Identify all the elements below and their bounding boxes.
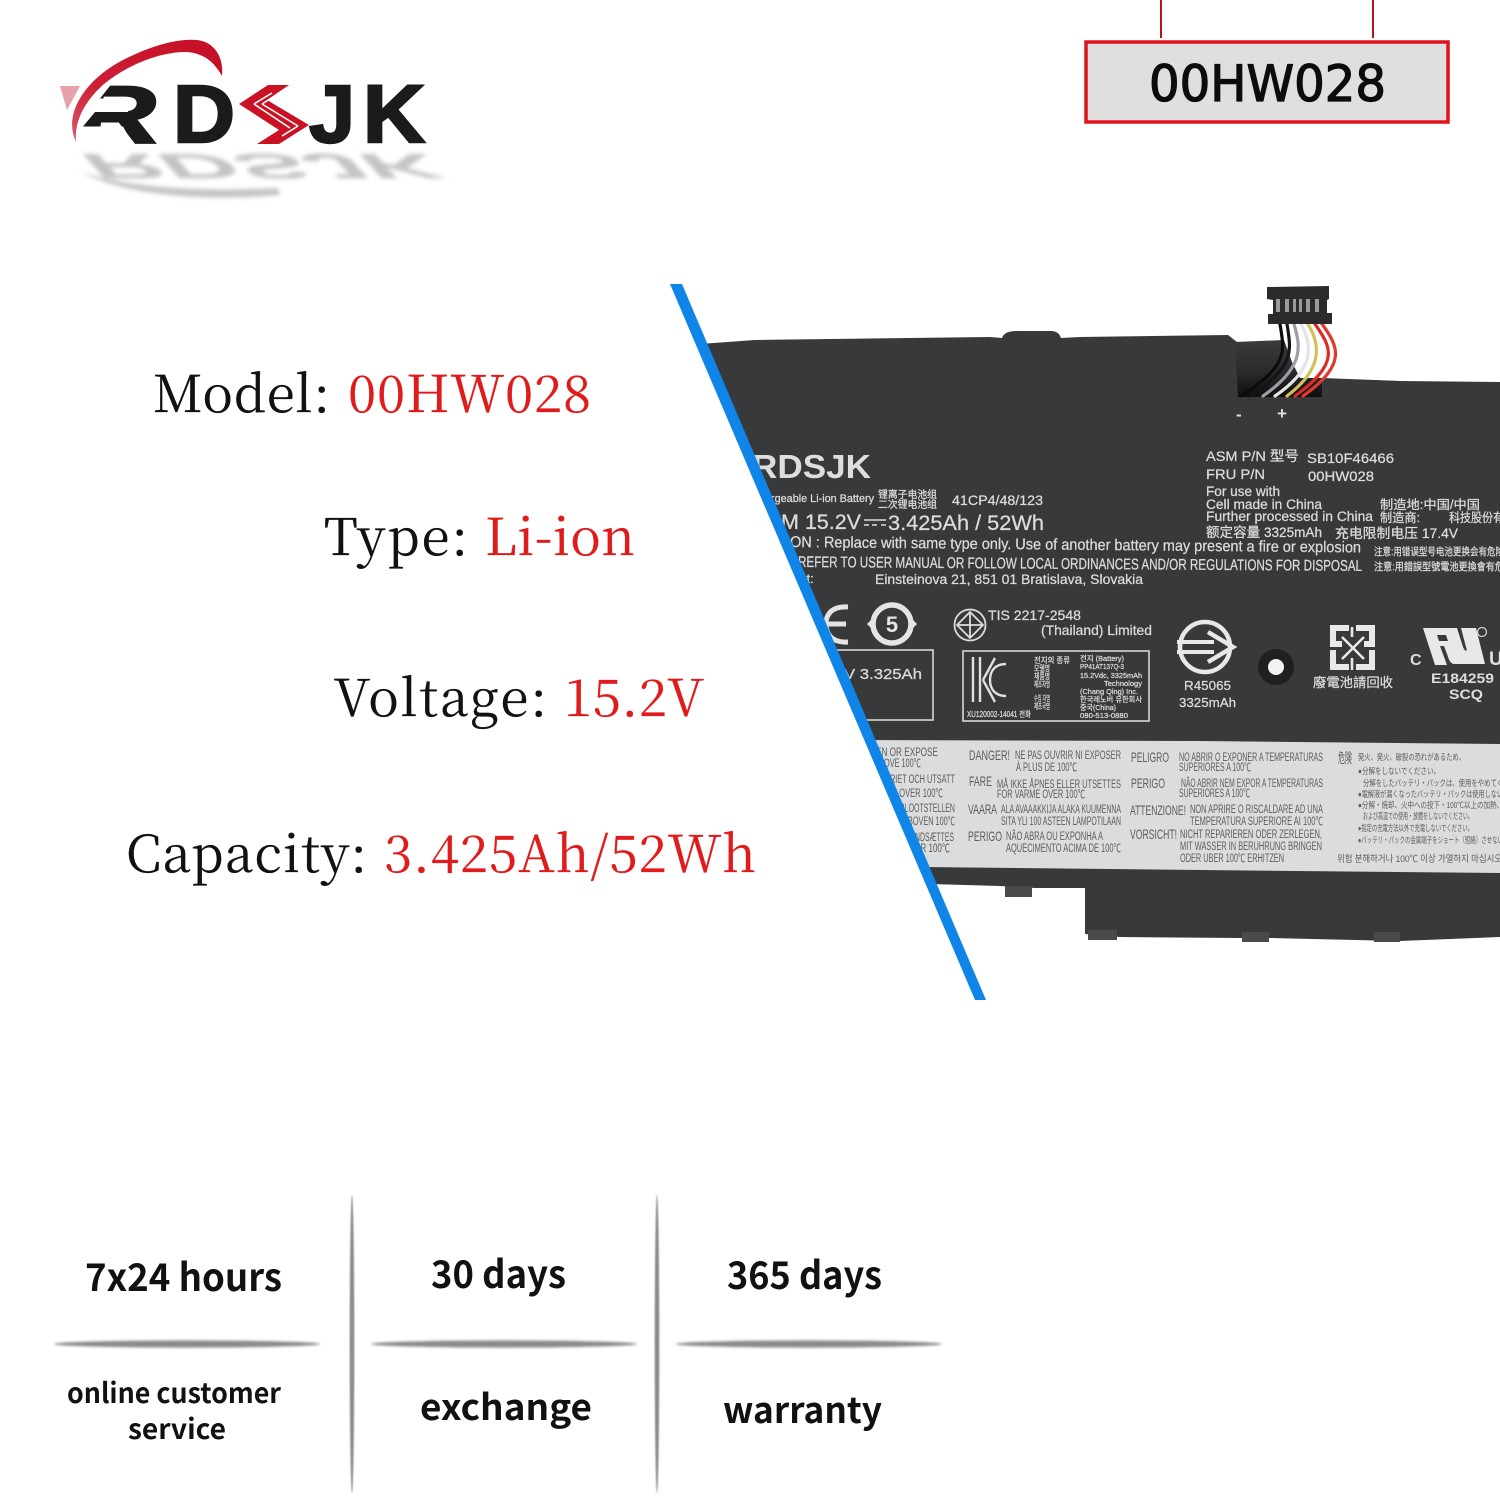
spec: type: Type: xyxy=(324,496,468,570)
warning text column 3: PERIGO xyxy=(1131,775,1165,791)
spec: type: Li-ion xyxy=(485,496,635,570)
warning text column 3: MIT WASSER IN BERUHRUNG BRINGEN xyxy=(1180,841,1322,853)
KC certification box xyxy=(963,651,1149,721)
rating box: V 3.325Ah xyxy=(844,667,922,683)
KC certification box: 중국(China) xyxy=(1080,703,1116,712)
warning text column 1 xyxy=(876,747,955,855)
part number text: Cell made in China xyxy=(1206,497,1322,512)
part number text: Further processed in China xyxy=(1206,509,1373,524)
BSMI text xyxy=(1179,680,1236,708)
warning text column 1: ER 100℃ xyxy=(915,843,950,855)
blue diagonal divider xyxy=(670,284,986,1000)
UL mark: SCQ xyxy=(1449,686,1483,702)
warning text column 2: DANGER! xyxy=(969,747,1010,763)
spec: capacity: Capacity: xyxy=(126,813,367,887)
KC certification box: (Chang Qing) Inc. xyxy=(1080,687,1138,696)
battery spec text: M 15.2V xyxy=(781,511,861,534)
icon: BSMI arrow circle xyxy=(1177,622,1233,672)
warning label xyxy=(860,740,1500,873)
cable wires xyxy=(1241,324,1336,396)
warning text column 2: À PLUS DE 100℃ xyxy=(1016,761,1077,774)
BSMI text: R45065 xyxy=(1184,678,1231,693)
battery spec text: ON : Replace with same type only. Use of another battery may present a fire or explosion xyxy=(790,534,1361,556)
KC certification box: 전지 (Battery) xyxy=(1080,653,1124,663)
warning text column 3: NICHT REPARIEREN ODER ZERLEGEN, xyxy=(1180,829,1322,841)
battery spec text: 41CP4/48/123 xyxy=(952,492,1043,508)
part number text: ASM P/N 型号 xyxy=(1206,448,1299,464)
model label box xyxy=(1086,0,1448,122)
part number text: 充电限制电压 17.4V xyxy=(1335,526,1458,541)
service column: warranty: warranty xyxy=(723,1382,882,1434)
warning text column 2: NE PAS OUVRIR NI EXPOSER xyxy=(1015,750,1121,762)
part number text: 00HW028 xyxy=(1308,468,1374,484)
warning text column 2: FARE xyxy=(969,773,992,789)
spec: capacity xyxy=(126,813,756,887)
part number text: 额定容量 3325mAh xyxy=(1206,524,1322,540)
spec: voltage xyxy=(334,657,704,731)
icon: CE mark xyxy=(826,607,848,642)
warning text column 1: BOVEN 100℃ xyxy=(908,816,955,828)
service column: warranty xyxy=(723,1245,882,1434)
logo letter R: R xyxy=(71,70,165,161)
warning text column 1: BLOOTSTELLEN xyxy=(900,803,955,815)
icon: TIS mark xyxy=(954,610,986,640)
battery spec text: 锂离子电池组 xyxy=(878,488,937,501)
model label box: 00HW028 xyxy=(1149,55,1386,113)
UL mark: C xyxy=(1410,652,1422,669)
icon: recycle mark xyxy=(1333,627,1372,670)
warning text column 3: ODER UBER 100℃ ERHITZEN xyxy=(1180,853,1284,865)
warning text column 3: NON APRIRE O RISCALDARE AD UNA xyxy=(1190,804,1323,816)
battery spec text: ct: xyxy=(800,571,814,586)
spec: voltage: 15.2V xyxy=(564,657,704,731)
warning text column 3: NÃO ABRIR NEM EXPOR A TEMPERATURAS xyxy=(1181,777,1323,790)
warning text column 2: SITA YLI 100 ASTEEN LAMPOTILAAN xyxy=(1001,816,1121,828)
KC certification box: 제조국명 xyxy=(1034,701,1050,711)
warning text column 4: ●分解をしないでください。 xyxy=(1358,766,1440,776)
spec: capacity: 3.425Ah/52Wh xyxy=(384,813,756,887)
KC certification box: 모델명 xyxy=(1034,663,1050,673)
KC certification box: 080-513-0880 xyxy=(1080,711,1128,720)
part number text: For use with xyxy=(1206,484,1280,499)
logo chevrons xyxy=(239,85,309,144)
logo letter J: J xyxy=(309,69,355,160)
cable connector xyxy=(1267,286,1332,324)
KC certification box: 15.2Vdc, 3325mAh xyxy=(1080,671,1142,680)
logo reflection: RDSJK xyxy=(69,146,456,186)
warning text column 3: NO ABRIR O EXPONER A TEMPERATURAS xyxy=(1179,752,1323,764)
battery spec text xyxy=(765,488,1362,587)
BSMI text: 3325mAh xyxy=(1179,695,1236,710)
logo: RDSJK xyxy=(58,40,456,197)
TIS text: (Thailand) Limited xyxy=(1041,622,1152,638)
KC certification box: PP41AT137Q-3 xyxy=(1080,662,1124,671)
battery spec text: 3.425Ah / 52Wh xyxy=(888,512,1044,535)
warning text column 1: NDSÆTTES xyxy=(915,832,954,844)
spec: model xyxy=(153,353,591,427)
part number text: 制造商: xyxy=(1380,510,1420,525)
warning text column 2: ALA AVAAAKKIJA ALAKA KUUMENNA xyxy=(1001,804,1121,816)
part number text xyxy=(1206,448,1500,573)
service column: support: 7x24 hours xyxy=(85,1247,282,1302)
KC certification box: 수입 자명 xyxy=(1034,693,1050,703)
KC certification box: 전지의 종류 xyxy=(1034,655,1070,665)
TIS text xyxy=(988,607,1152,638)
warning text column 4: 発火、発火、破裂の恐れがあるため、 xyxy=(1358,752,1465,762)
warning text column 4 xyxy=(1337,750,1500,865)
battery spec text: 二次锂电池组 xyxy=(878,498,937,511)
warning text column 2: VAARA xyxy=(968,801,997,817)
warning text column 2: AQUECIMENTO ACIMA DE 100℃ xyxy=(1006,843,1121,855)
logo reflection xyxy=(69,146,456,197)
service column: exchange xyxy=(420,1244,592,1431)
warning text column 1: OVE 100℃ xyxy=(884,758,921,770)
service column: support: service xyxy=(128,1408,226,1448)
polarity marks xyxy=(1236,409,1286,418)
warning text column 4: 危険 xyxy=(1338,750,1352,766)
warning text column 3: SUPERIORES A 100℃ xyxy=(1179,762,1251,774)
UL mark: E184259 xyxy=(1431,670,1494,686)
warning text column 1: RIET OCH UTSATT xyxy=(890,774,955,786)
icon: recycling 5: 5 xyxy=(886,612,898,637)
warning text column 2: PERIGO xyxy=(968,828,1002,844)
warning text column 1: E OVER 100℃ xyxy=(892,788,943,800)
polarity marks: + xyxy=(1277,404,1287,423)
spec: voltage: Voltage: xyxy=(334,657,547,731)
polarity marks: - xyxy=(1236,405,1242,424)
UL mark xyxy=(1410,628,1500,702)
warning text column 3: TEMPERATURA SUPERIORE AI 100℃ xyxy=(1190,816,1323,828)
KC certification box: 한국레노버 유한회사 xyxy=(1080,694,1142,704)
warning text column 3 xyxy=(1130,749,1323,865)
battery photo xyxy=(700,286,1500,942)
service column: exchange: exchange xyxy=(420,1379,592,1431)
spec: model: Model: xyxy=(153,353,330,427)
logo letter K: K xyxy=(363,69,425,160)
part number text: SB10F46466 xyxy=(1307,450,1394,466)
warning text column 2: FOR VARME OVER 100℃ xyxy=(997,789,1085,801)
service column: support: online customer xyxy=(67,1372,282,1412)
warning text column 2: MÅ IKKE ÅPNES ELLER UTSETTES xyxy=(997,778,1121,791)
service column: warranty: 365 days xyxy=(727,1245,882,1300)
battery body xyxy=(700,331,1500,941)
icon: recycling 5 xyxy=(867,605,917,643)
battery spec text: Einsteinova 21, 851 01 Bratislava, Slovakia xyxy=(875,572,1144,587)
KC certification box: 제조자명 xyxy=(1034,679,1050,689)
warning text column 2: NÃO ABRA OU EXPONHA A xyxy=(1006,830,1103,843)
battery spec text: argeable Li-ion Battery xyxy=(765,493,874,505)
warning text column 1: EN OR EXPOSE xyxy=(876,747,938,759)
service column: support xyxy=(67,1247,282,1448)
warning text column 3: ATTENZIONE! xyxy=(1130,802,1186,818)
KC certification box: 제품명 xyxy=(1034,671,1050,681)
logo swoosh xyxy=(72,40,222,142)
part number text: FRU P/N xyxy=(1206,466,1265,482)
spec: type xyxy=(324,496,635,570)
KC certification box: Technology xyxy=(1104,679,1142,688)
rating box xyxy=(837,649,934,721)
service column: exchange: 30 days xyxy=(431,1244,566,1299)
KC certification box: XU120002-14041 전화 xyxy=(967,709,1032,719)
warning text column 3: PELIGRO xyxy=(1131,749,1169,765)
logo triangle xyxy=(60,86,80,110)
spec: model: 00HW028 xyxy=(348,353,591,427)
battery notch xyxy=(1235,340,1322,397)
TIS text: TIS 2217-2548 xyxy=(988,607,1081,623)
warning text column 2 xyxy=(968,747,1121,855)
recycle text: 廢電池請回收 xyxy=(1313,675,1393,690)
warning text column 3: VORSICHT! xyxy=(1130,826,1177,842)
battery mounting hole xyxy=(1258,649,1294,685)
part number text: 制造地:中国/中国 xyxy=(1380,497,1480,512)
warning text column 3: SUPERIORES A 100℃ xyxy=(1179,788,1250,800)
battery bottom tabs xyxy=(1005,886,1400,942)
logo letter D: D xyxy=(173,69,235,160)
brand text: RDSJK xyxy=(752,448,871,485)
